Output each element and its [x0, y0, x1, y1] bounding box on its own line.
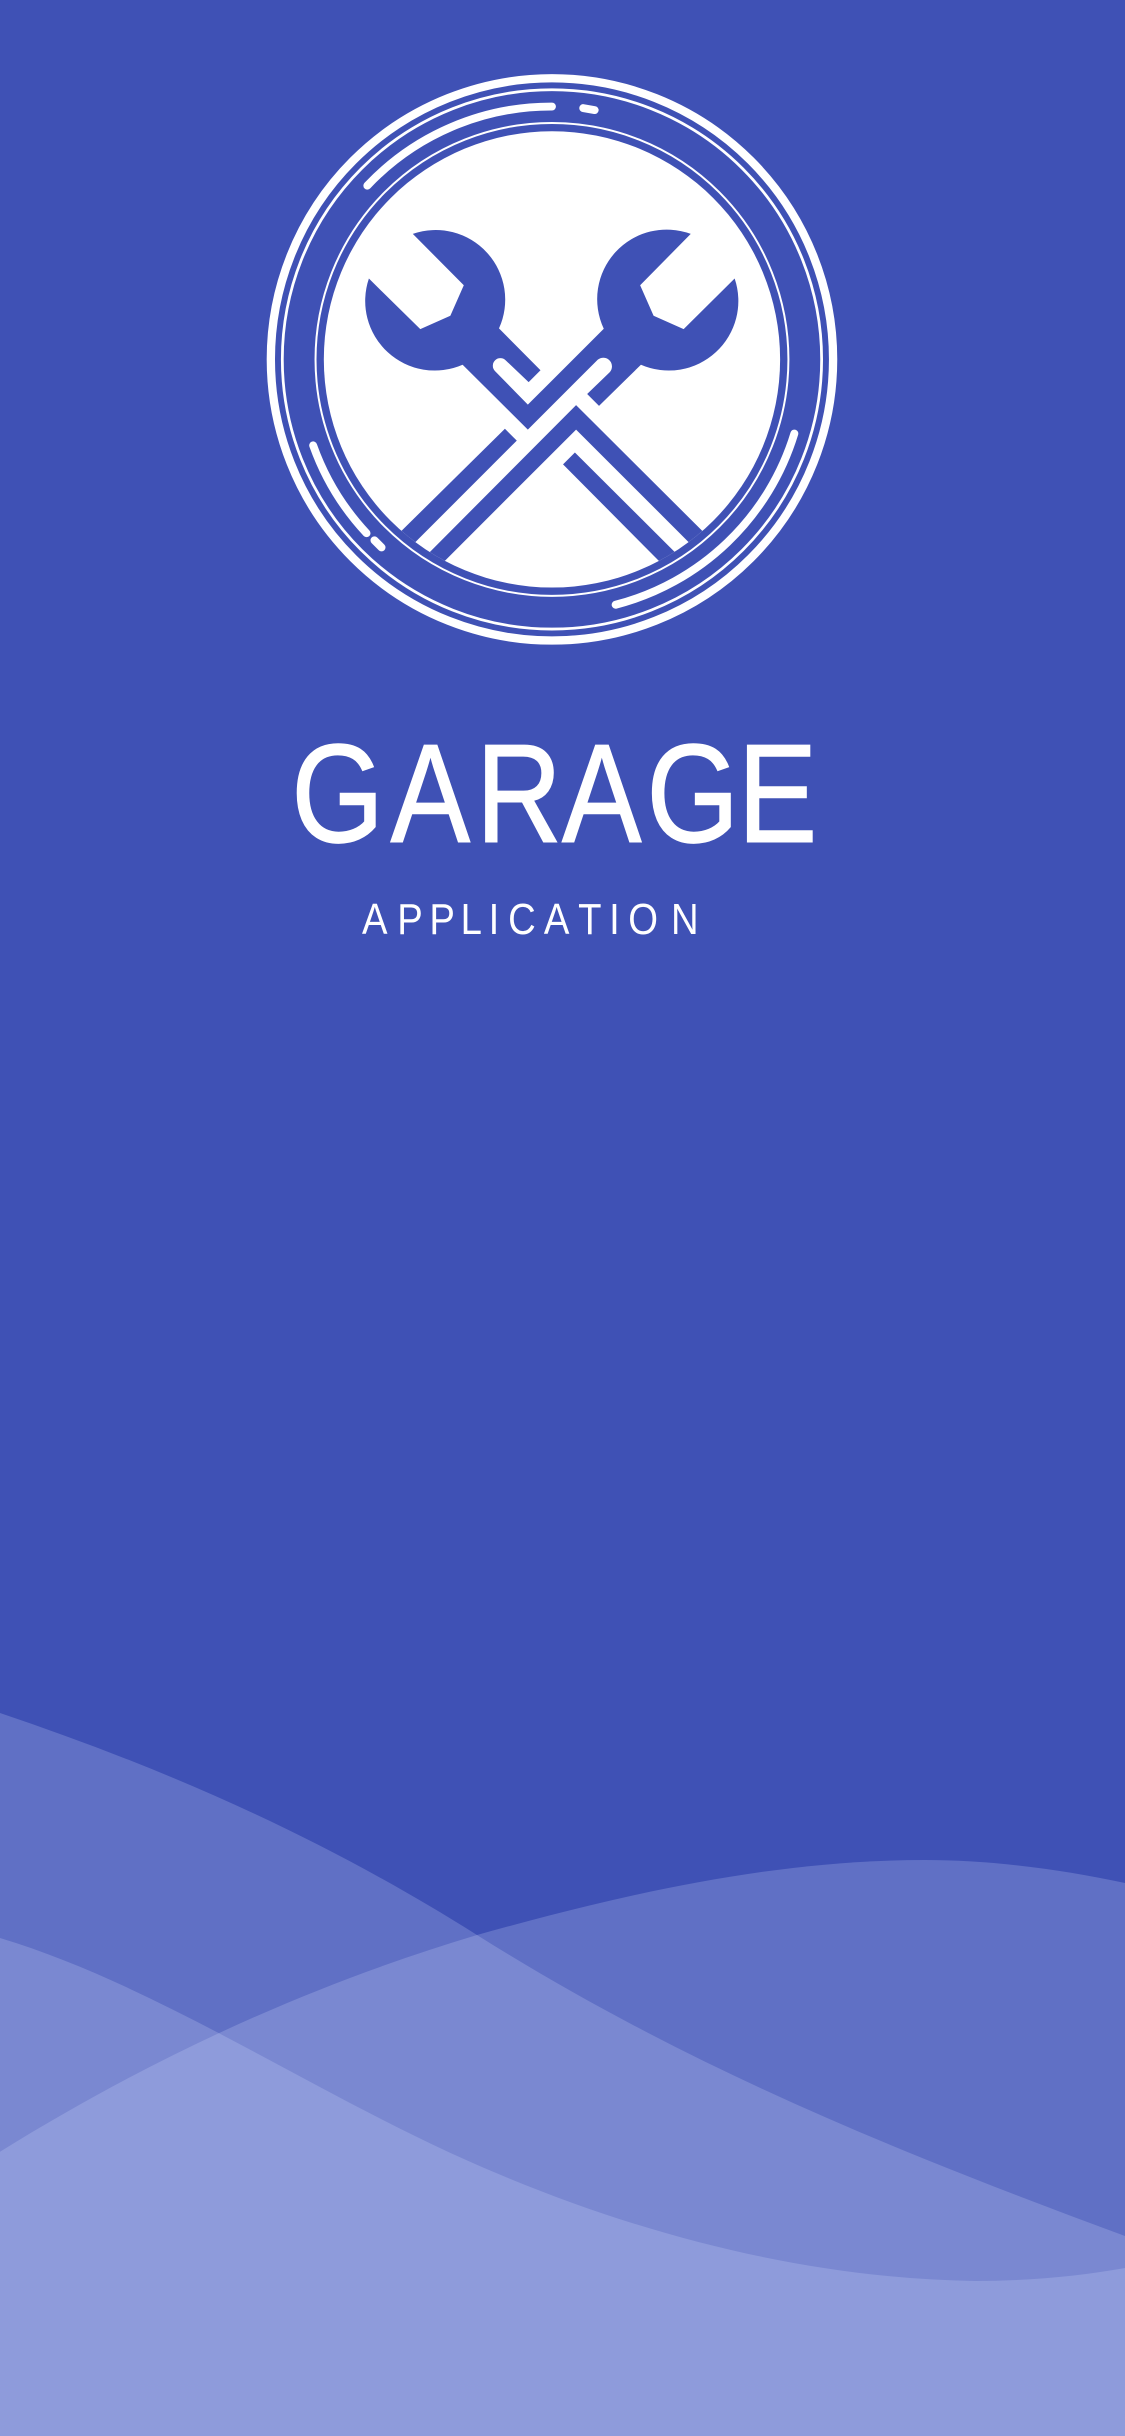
outer rings	[271, 78, 833, 641]
white disc	[324, 131, 780, 588]
left handle lower band	[402, 428, 517, 542]
logo emblem	[271, 78, 833, 641]
wrench heads and handles	[365, 230, 738, 430]
right handle lower band	[563, 452, 674, 561]
title: GARAGE	[291, 715, 817, 872]
ring accent arcs	[313, 107, 794, 605]
subtitle: APPLICATION	[362, 895, 699, 944]
wave: upper left descending	[0, 1713, 1125, 2436]
chevron handle band	[430, 405, 702, 561]
wave: lower left descending	[0, 1938, 1125, 2436]
wave: rising from left	[0, 1860, 1125, 2436]
background waves	[0, 1713, 1125, 2436]
icon: crossed wrenches	[365, 230, 738, 577]
